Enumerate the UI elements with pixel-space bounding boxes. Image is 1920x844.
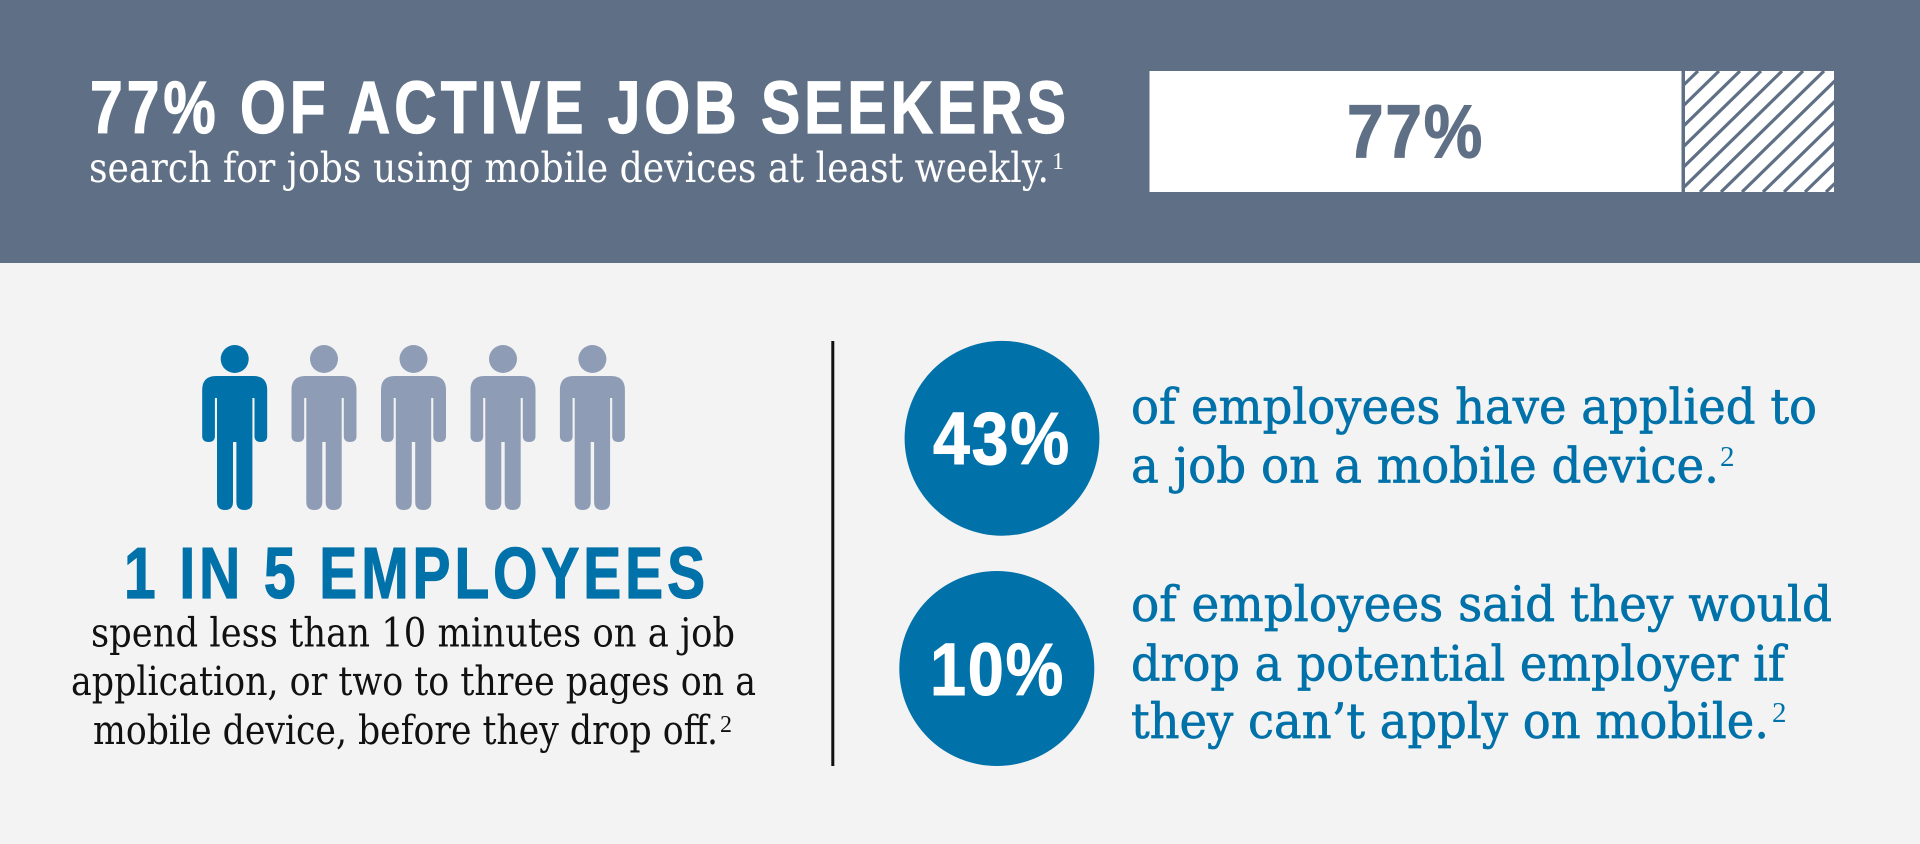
text: drop-off description (71, 611, 756, 754)
panel: 10% stat (899, 571, 1832, 766)
icon: grey person 5 (560, 345, 625, 510)
divider (831, 341, 834, 766)
icon: row of five people (202, 345, 625, 510)
icon: 10% circle (899, 571, 1094, 766)
icon: grey person 3 (381, 345, 446, 510)
text: 43% description: of employees have applied to (1131, 378, 1817, 435)
text: 10% description: 2 (1772, 697, 1786, 729)
icon: 43% circle: 43% (933, 397, 1071, 480)
icon: 10% circle: 10% (930, 628, 1065, 711)
bar: filled portion (1150, 71, 1682, 192)
icon: grey person 2 (292, 345, 356, 510)
panel: 1 in 5 employees (71, 345, 756, 754)
text: 10% description (1131, 576, 1832, 750)
chart: 77% progress bar (1150, 71, 1834, 192)
text: 10% description: of employees said they would (1131, 576, 1832, 633)
panel: top banner (0, 0, 1920, 263)
text: banner subtitle: search for jobs using mobile devices at least weekly. (89, 144, 1049, 192)
icon: highlighted person (202, 345, 267, 510)
text: 43% description: a job on a mobile device. (1131, 438, 1719, 495)
text: drop-off description: application, or two to three pages on a (71, 659, 756, 705)
text: 10% description: they can’t apply on mobile. (1131, 693, 1769, 750)
text: drop-off description: spend less than 10 minutes on a job (91, 611, 735, 657)
heading: 77% of active job seekers: 77% OF ACTIVE JOB SEEKERS (90, 66, 1070, 149)
bar: hatched remainder (1685, 71, 1834, 192)
text: drop-off description: 2 (720, 712, 732, 738)
heading: 1 in 5 employees: 1 IN 5 EMPLOYEES (124, 534, 709, 614)
bar: filled portion: 77% (1347, 89, 1484, 173)
icon: grey person 4 (470, 345, 536, 510)
text: drop-off description: mobile device, before they drop off. (93, 708, 718, 754)
text: 10% description: drop a potential employer if (1131, 636, 1789, 693)
text: 43% description (1131, 378, 1817, 495)
icon: 43% circle (905, 341, 1099, 536)
text: banner subtitle: 1 (1052, 149, 1064, 175)
text: 43% description: 2 (1720, 441, 1734, 473)
panel: 43% stat (905, 341, 1817, 536)
